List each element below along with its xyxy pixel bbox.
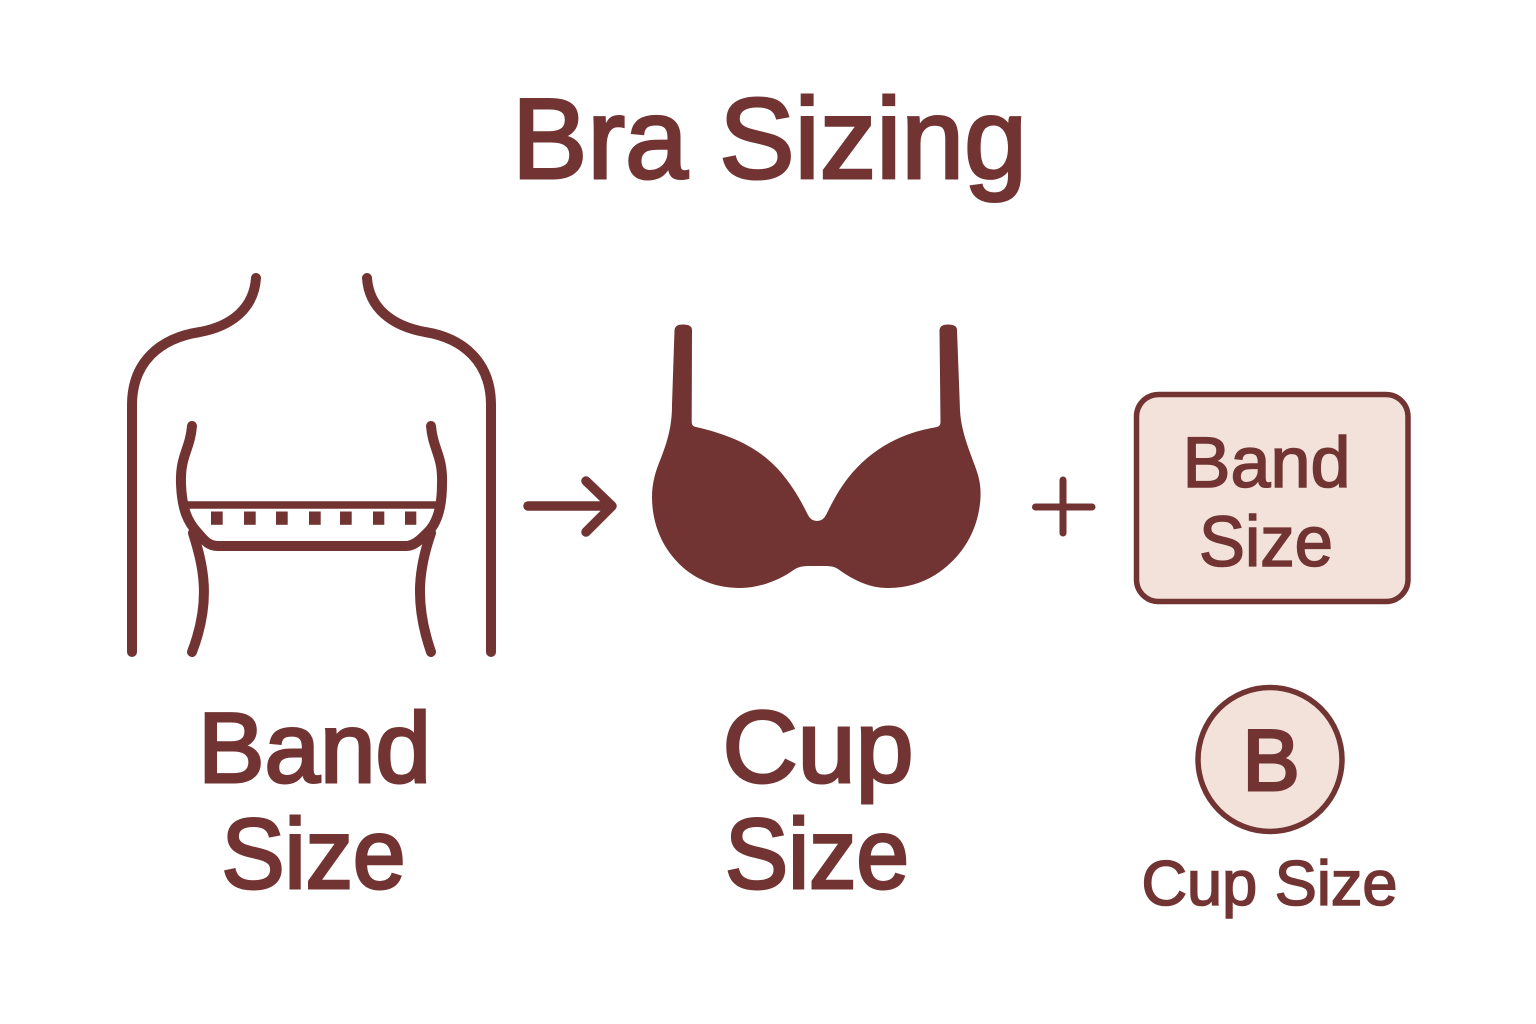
icon: bra silhouette <box>652 324 981 588</box>
right waist <box>420 533 431 652</box>
title: Bra Sizing <box>512 76 1027 203</box>
icon: torso with measuring tape <box>132 278 491 652</box>
label: band size: Band <box>198 692 431 803</box>
measuring tape band and torso sides <box>181 426 442 546</box>
box: band size <box>1136 394 1408 602</box>
left waist <box>192 533 204 652</box>
box label: Band <box>1182 424 1350 503</box>
text: Size <box>222 798 406 909</box>
plus sign <box>1036 480 1092 533</box>
tape tick marks <box>211 512 416 525</box>
caption: cup size: Cup Size <box>1142 849 1398 919</box>
box: band size: Size <box>1199 503 1333 582</box>
badge: cup letter B: B <box>1242 713 1300 809</box>
tape top edge <box>186 501 438 509</box>
right shoulder and arm outline <box>367 278 491 652</box>
text: Size <box>725 798 909 909</box>
label: cup size: Cup <box>722 690 914 804</box>
arrow <box>528 481 612 532</box>
left shoulder and arm outline <box>132 278 256 652</box>
badge: cup letter B <box>1198 688 1342 832</box>
